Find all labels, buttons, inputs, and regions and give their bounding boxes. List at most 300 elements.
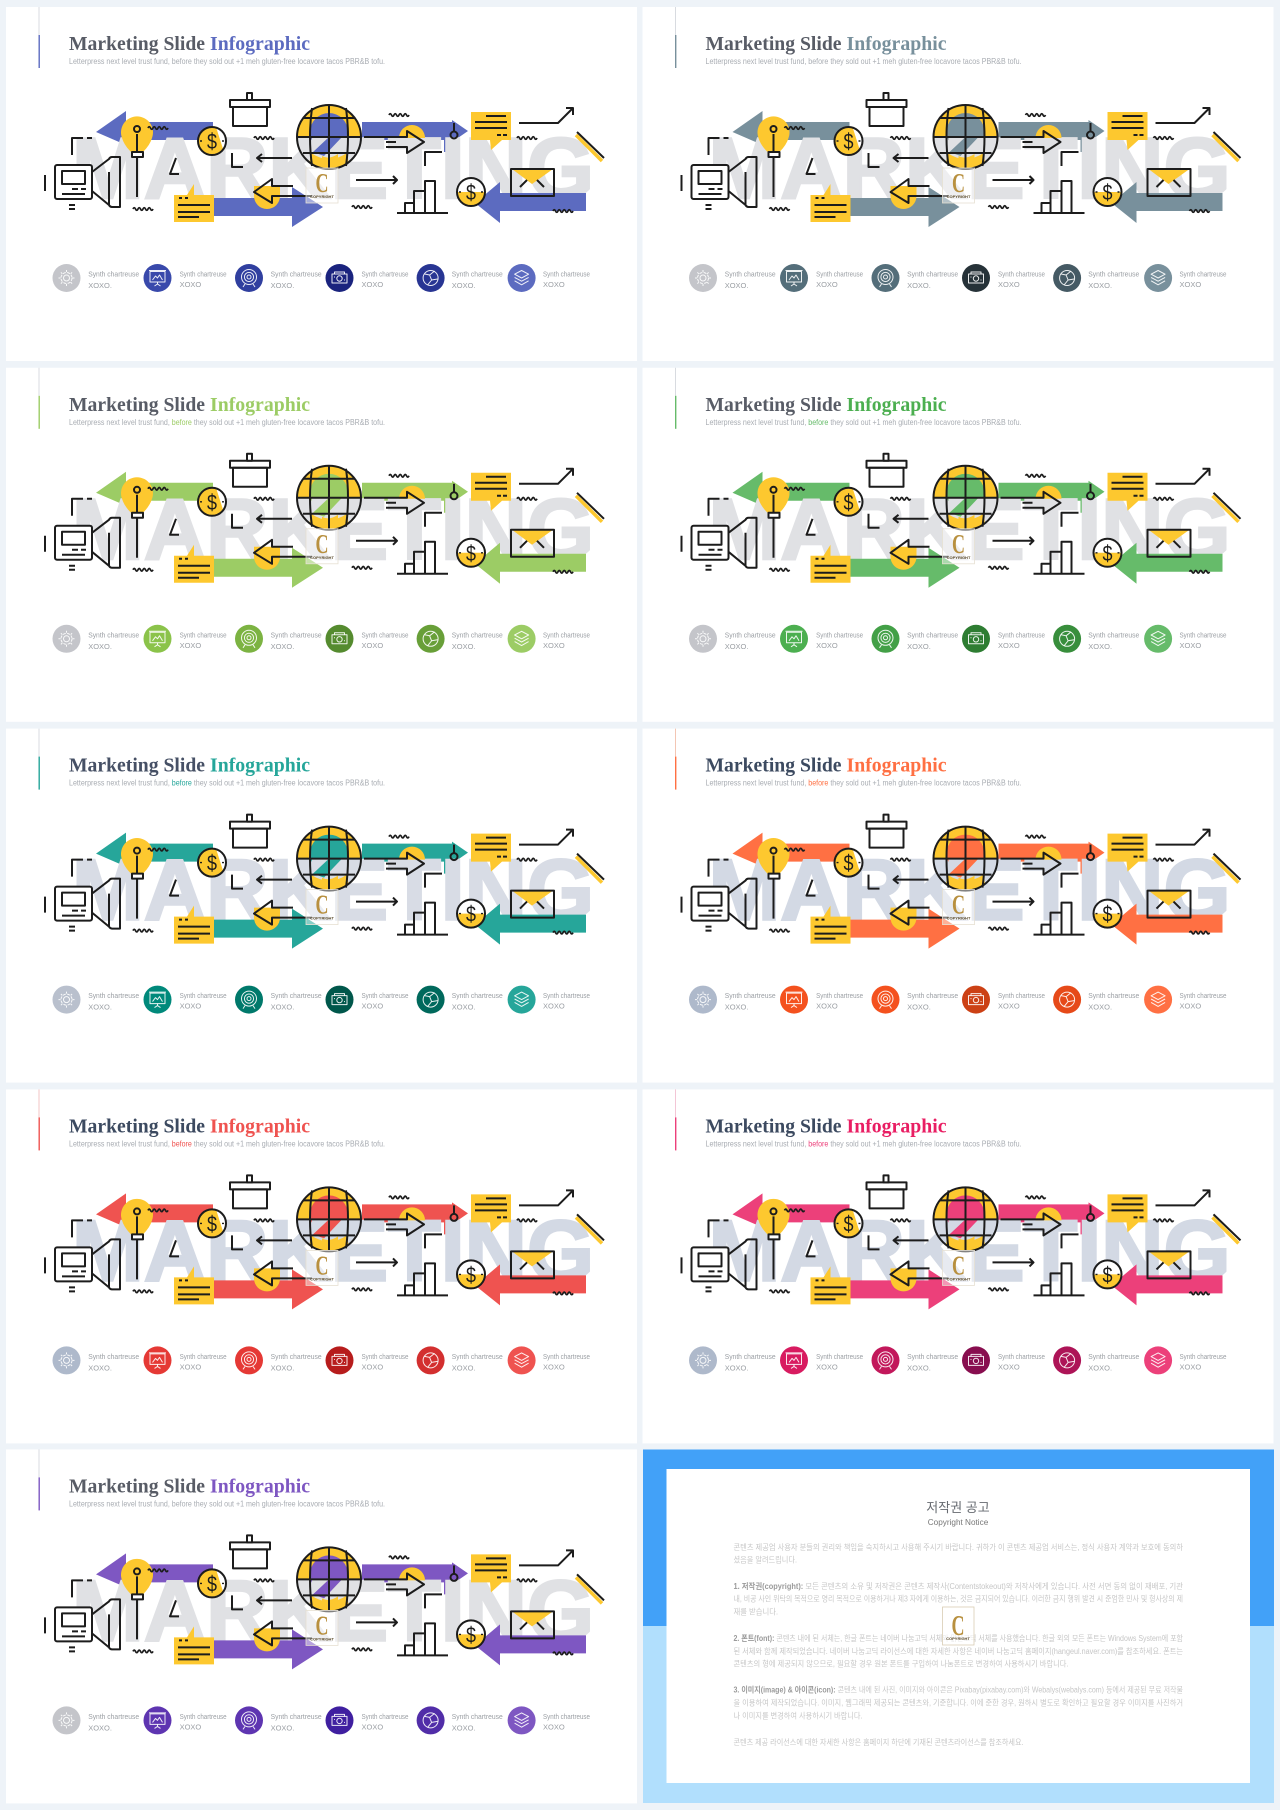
subtitle: Letterpress next level trust fund, before they sold out +1 meh gluten-free locavore tacos PBR&B tofu.	[706, 418, 1022, 427]
arrow: hollow right	[364, 847, 425, 875]
legend item 2	[780, 264, 863, 292]
legend item 2: XOXO	[816, 1362, 838, 1371]
icon: diagonal pencil	[1212, 1214, 1240, 1243]
legend item 6: Synth chartreuse	[1180, 1352, 1226, 1361]
icon: coin top: $	[844, 490, 854, 515]
legend item 5	[417, 625, 503, 653]
arrows: top	[732, 1193, 1104, 1234]
legend item 3: XOXO.	[271, 1003, 294, 1012]
legend item 4	[962, 986, 1045, 1014]
panel: blue-grey slide	[642, 7, 1274, 361]
arrows: bottom	[850, 543, 1222, 588]
logo stamp: COPYRIGHT	[310, 1636, 334, 1641]
legend item 6: XOXO	[543, 1722, 565, 1731]
logo stamp: COPYRIGHT	[947, 555, 971, 560]
icon: monitor and horn	[682, 499, 756, 570]
icon: basket	[230, 93, 270, 126]
title: Marketing Slide	[69, 33, 205, 55]
icon: coin top	[198, 127, 226, 155]
arrow: trend up	[1156, 1190, 1210, 1205]
icon: coin bottom	[457, 900, 485, 928]
icon: coin bottom: $	[466, 1622, 476, 1647]
icon: envelope	[511, 891, 554, 918]
panel: red slide	[6, 1089, 637, 1443]
logo stamp	[942, 1250, 974, 1285]
arrow: trend up	[519, 1550, 573, 1565]
arrows: bottom	[850, 1264, 1222, 1309]
icon: light bulb	[121, 1559, 153, 1639]
legend item 5	[417, 264, 503, 292]
legend item 5: XOXO.	[452, 281, 476, 290]
icon: coin bottom: $	[466, 1262, 476, 1287]
legend item 3	[235, 1346, 322, 1374]
legend item 5: Synth chartreuse	[452, 1712, 503, 1721]
subtitle: Letterpress next level trust fund, before they sold out +1 meh gluten-free locavore tacos PBR&B tofu.	[706, 57, 1022, 66]
panel: pink slide	[642, 1089, 1274, 1443]
legend item 4	[326, 264, 408, 292]
wordmark: MARKETING	[708, 482, 1230, 578]
icon: coin bottom: $	[1102, 180, 1112, 205]
accent line	[38, 1477, 40, 1510]
legend item 4: Synth chartreuse	[998, 630, 1045, 639]
title	[69, 394, 310, 416]
icon: diagonal pencil	[1212, 854, 1240, 883]
subtitle: Letterpress next level trust fund, before they sold out +1 meh gluten-free locavore tacos PBR&B tofu.	[69, 779, 385, 788]
heading: english: Copyright Notice	[928, 1518, 989, 1527]
legend item 5	[417, 986, 503, 1014]
squiggles	[133, 835, 573, 934]
logo stamp: C	[316, 1610, 328, 1640]
title	[69, 755, 310, 777]
small connector lines	[806, 484, 1094, 545]
title: Infographic	[210, 33, 310, 55]
icon: diagonal pencil	[1212, 493, 1240, 522]
title: Infographic	[846, 394, 946, 416]
legend item 4: Synth chartreuse	[362, 630, 408, 639]
legend item 4	[962, 625, 1045, 653]
icon: light bulb	[758, 116, 790, 197]
legend item 4: Synth chartreuse	[362, 991, 408, 1000]
legend item 3	[235, 625, 322, 653]
icon: coin bottom: $	[466, 902, 476, 927]
legend item 6: Synth chartreuse	[543, 1712, 590, 1721]
legend item 2: Synth chartreuse	[816, 1352, 863, 1361]
icon: coin top	[198, 849, 226, 877]
notice 1: copyright	[734, 1581, 1184, 1616]
squiggles	[133, 1196, 573, 1295]
icon: coin top	[198, 488, 226, 516]
legend item 1	[689, 264, 776, 292]
icon: globe	[295, 1187, 365, 1254]
legend item 3: XOXO.	[271, 281, 294, 290]
arrow: trend up	[519, 469, 573, 484]
squiggles	[770, 474, 1210, 573]
arrows: bottom	[214, 543, 586, 588]
logo stamp	[306, 1250, 338, 1285]
legend item 1: Synth chartreuse	[725, 1352, 776, 1361]
notice intro: 콘텐츠 제공업 사용자 분들의 권리와 책임을 숙지하시고 사용해 주시기 바랍니다. 귀하가 이 콘텐츠 제공업 서비스는, 정식 사용자 계약과 보호에 동의하	[734, 1542, 1184, 1552]
title: Marketing Slide	[69, 1475, 205, 1497]
squiggles	[770, 114, 1210, 212]
subtitle: Letterpress next level trust fund, before they sold out +1 meh gluten-free locavore tacos PBR&B tofu.	[706, 779, 1022, 788]
arrow: hollow left	[890, 901, 948, 931]
squiggles	[133, 1556, 573, 1655]
title: Infographic	[846, 1115, 946, 1137]
title	[69, 1475, 310, 1497]
icon: envelope	[1148, 891, 1190, 918]
arrow: hollow right	[364, 1207, 425, 1235]
legend item 6	[1144, 625, 1226, 653]
legend item 3	[872, 264, 958, 292]
legend item 5	[1053, 625, 1139, 653]
logo stamp: COPYRIGHT	[310, 916, 334, 921]
arrow: hollow left	[254, 901, 312, 931]
notice 3: image and icon: 나 이미지를 변경하여 사용하시기 바랍니다.	[734, 1710, 862, 1720]
title: Marketing Slide	[706, 394, 842, 416]
legend item 6: XOXO	[543, 280, 565, 289]
legend item 2: Synth chartreuse	[180, 630, 227, 639]
wordmark: MARKETING	[72, 1203, 594, 1299]
legend item 1: XOXO.	[88, 281, 112, 290]
accent line	[675, 1117, 676, 1150]
legend item 5: XOXO.	[1088, 281, 1112, 290]
icon: envelope	[511, 530, 554, 557]
notice 3: image and icon: 을 이용하여 제작되었습니다. 이미지, 웹그래픽 제공되는 콘텐츠와, 기준합니다. 이에 준한 경우, 원하시 별도로 확인하고 필요할 경우 이미지를 사진하거	[734, 1698, 1183, 1708]
legend item 5: Synth chartreuse	[452, 991, 503, 1000]
icon: globe	[295, 1547, 365, 1614]
icon: chat right	[471, 1554, 511, 1592]
legend item 6: XOXO	[543, 1362, 565, 1371]
icon: envelope	[1148, 530, 1190, 557]
logo stamp: C	[952, 1250, 965, 1280]
legend item 1: XOXO.	[88, 1723, 112, 1732]
arrow: hollow right	[1000, 847, 1062, 875]
legend item 6	[508, 1346, 590, 1374]
subtitle: Letterpress next level trust fund, before they sold out +1 meh gluten-free locavore tacos PBR&B tofu.	[69, 418, 385, 427]
title	[69, 33, 310, 55]
notice 2: font: 2. 폰트(font): 콘텐츠 내에 된 서체는, 한글 폰트는 네이버 나눔고딕 서체와 맑은고딕 서체를 사용했습니다. 한글 외의 모든 폰트는 Windows System에 포함	[734, 1633, 1184, 1643]
arrows: top	[732, 833, 1104, 874]
subtitle: Letterpress next level trust fund, before they sold out +1 meh gluten-free locavore tacos PBR&B tofu.	[69, 1139, 385, 1148]
arrows: bottom	[214, 904, 586, 949]
arrow: hollow right	[364, 486, 425, 514]
arrow: hollow left	[890, 540, 948, 570]
arrow: hollow right	[1000, 1207, 1062, 1235]
icon: globe	[295, 466, 365, 533]
legend item 4: Synth chartreuse	[362, 1712, 408, 1721]
icon: coin top	[834, 849, 862, 877]
icon: coin bottom: $	[1102, 1262, 1112, 1287]
logo stamp: C	[952, 1610, 964, 1642]
icon: coin top	[198, 1209, 226, 1237]
icon: coin bottom	[1094, 1260, 1122, 1288]
squiggles	[770, 1196, 1210, 1295]
accent line	[38, 757, 40, 790]
title	[706, 1115, 946, 1137]
icon: light bulb	[121, 1199, 153, 1279]
icon: chat left	[174, 184, 214, 222]
icon: globe	[932, 466, 1002, 533]
logo stamp: COPYRIGHT	[947, 1276, 971, 1281]
legend item 2: XOXO	[180, 280, 201, 289]
frame bottom light blue	[643, 1626, 1274, 1803]
legend item 6	[508, 1706, 590, 1734]
icon: coin top	[834, 127, 862, 155]
title: Infographic	[210, 394, 310, 416]
icon: coin bottom	[457, 1620, 485, 1648]
legend item 3: Synth chartreuse	[271, 270, 322, 278]
small connector lines	[806, 845, 1094, 906]
icon: chat left	[810, 1266, 850, 1304]
legend item 6: XOXO	[1180, 641, 1201, 650]
legend item 2	[144, 1346, 227, 1374]
bar chart	[1034, 903, 1084, 935]
logo stamp: C	[316, 168, 328, 198]
legend item 2: XOXO	[816, 641, 838, 650]
bar chart	[397, 1623, 448, 1655]
legend item 6: Synth chartreuse	[543, 991, 590, 1000]
notice 2: font: 된 서체와 함께 제작되었습니다. 네이버 나눔고딕 라이선스에 대한 자세한 사항은 네이버 나눔고딕 홈페이지(hangeul.naver.com)를 참조하세요. 폰트는	[734, 1646, 1183, 1656]
logo stamp	[306, 168, 338, 203]
legend item 4: XOXO	[362, 641, 383, 650]
legend item 1: Synth chartreuse	[725, 270, 776, 278]
legend item 5	[417, 1346, 503, 1374]
icon: chat right	[471, 834, 511, 872]
logo stamp: COPYRIGHT	[947, 916, 971, 921]
legend item 6	[1144, 264, 1226, 292]
arrows: bottom	[214, 1624, 586, 1669]
title: Infographic	[846, 33, 946, 55]
icon: chat left	[174, 906, 214, 944]
accent line	[38, 396, 40, 429]
small connector lines	[170, 484, 458, 545]
title: Infographic	[210, 1115, 310, 1137]
legend item 4: XOXO	[362, 1002, 383, 1011]
legend item 1: XOXO.	[725, 642, 748, 651]
legend item 1	[52, 1706, 139, 1734]
panel: light green slide	[6, 368, 637, 722]
legend item 3: XOXO.	[907, 281, 931, 290]
legend item 6: Synth chartreuse	[1180, 630, 1226, 639]
icon: monitor and horn	[682, 860, 756, 931]
small connector lines	[170, 845, 458, 906]
icon: chat right	[1108, 1194, 1148, 1232]
notice 1: copyright: 재를 받습니다.	[734, 1606, 778, 1616]
legend item 1: XOXO.	[88, 642, 112, 651]
legend item 2	[780, 986, 863, 1014]
logo stamp: C	[952, 168, 965, 198]
squiggles	[133, 474, 573, 573]
legend item 4: Synth chartreuse	[998, 270, 1045, 278]
icon: chat left	[810, 545, 850, 583]
icon: coin bottom	[457, 1260, 485, 1288]
legend item 6	[508, 986, 590, 1014]
icon: monitor and horn	[45, 1580, 120, 1651]
legend item 4: Synth chartreuse	[998, 991, 1045, 1000]
legend item 6: XOXO	[1180, 280, 1201, 289]
legend item 1: XOXO.	[725, 281, 748, 290]
icon: coin bottom	[1094, 539, 1122, 567]
logo stamp: COPYRIGHT	[947, 194, 971, 199]
arrows: top	[96, 833, 468, 874]
squiggles	[133, 114, 573, 212]
notice 1: copyright: 1. 저작권(copyright): 모든 콘텐츠의 소유 및 저작권은 콘텐츠 제작사(Contentstokeout)와 저작사에게 있습니다. 사전 서면 동의 없이 재배포, 기관	[734, 1581, 1184, 1591]
accent line	[38, 35, 40, 68]
icon: basket	[230, 1535, 270, 1568]
wordmark: MARKETING	[72, 121, 594, 217]
legend item 3: Synth chartreuse	[907, 630, 958, 639]
title: Marketing Slide	[706, 33, 842, 55]
arrow: hollow left	[890, 1261, 948, 1291]
icon: coin top: $	[844, 851, 854, 876]
legend item 5: XOXO.	[452, 1363, 476, 1372]
icon: monitor and horn	[682, 1220, 756, 1291]
legend item 5: XOXO.	[1088, 1003, 1112, 1012]
arrows: top	[96, 472, 468, 513]
legend item 2: Synth chartreuse	[180, 1352, 227, 1361]
legend item 5: XOXO.	[452, 1723, 476, 1732]
bar chart	[397, 181, 448, 213]
arrow: trend up	[1156, 469, 1210, 484]
icon: coin top: $	[207, 851, 217, 876]
legend item 4: Synth chartreuse	[998, 1352, 1045, 1361]
legend item 5	[1053, 264, 1139, 292]
arrows: top	[96, 111, 468, 152]
legend item 2: Synth chartreuse	[816, 630, 863, 639]
notice 3: image and icon	[734, 1684, 1183, 1720]
legend item 5: XOXO.	[1088, 1363, 1112, 1372]
logo stamp	[306, 1610, 338, 1645]
legend item 1	[52, 986, 139, 1014]
logo stamp	[942, 168, 974, 203]
panel: indigo slide	[6, 7, 637, 361]
logo stamp: C	[316, 890, 328, 920]
legend item 3: Synth chartreuse	[907, 1352, 958, 1361]
legend item 6: XOXO	[1180, 1362, 1201, 1371]
logo stamp	[942, 1607, 974, 1645]
icon: coin top: $	[844, 1211, 854, 1236]
notice 3: image and icon: 3. 이미지(image) & 아이콘(icon): 콘텐츠 내에 된 사진, 이미지와 아이콘은 Pixabay(pixabay.com)와 Webalys(webalys.com) 등에서 제공된 무료 저작물	[734, 1684, 1183, 1694]
arrows: top	[96, 1193, 468, 1234]
legend item 1: XOXO.	[88, 1003, 112, 1012]
arrow: trend up	[519, 1190, 573, 1205]
legend item 3	[235, 1706, 322, 1734]
legend item 3: XOXO.	[271, 1723, 294, 1732]
icon: coin bottom: $	[1102, 902, 1112, 927]
icon: monitor and horn	[45, 499, 120, 570]
wordmark: MARKETING	[708, 843, 1230, 939]
notice intro: 셨음을 알려드립니다.	[734, 1554, 797, 1564]
logo stamp: C	[952, 890, 965, 920]
logo stamp: C	[316, 529, 328, 559]
legend item 2: Synth chartreuse	[180, 270, 227, 278]
legend item 3: XOXO.	[907, 642, 931, 651]
logo stamp	[942, 529, 974, 564]
legend item 3: XOXO.	[907, 1363, 931, 1372]
small connector lines	[170, 123, 458, 184]
bar chart	[1034, 181, 1084, 213]
legend item 1: Synth chartreuse	[88, 1712, 139, 1721]
logo stamp	[306, 529, 338, 564]
legend item 6	[508, 264, 590, 292]
legend item 3: XOXO.	[271, 1363, 294, 1372]
wordmark: MARKETING	[72, 482, 594, 578]
title: Marketing Slide	[706, 755, 842, 777]
small connector lines	[806, 123, 1094, 184]
icon: globe	[932, 1187, 1002, 1254]
small connector lines	[806, 1205, 1094, 1266]
bar chart	[1034, 542, 1084, 574]
legend item 5: XOXO.	[452, 642, 476, 651]
legend item 4	[326, 986, 408, 1014]
legend item 3: Synth chartreuse	[271, 1352, 322, 1361]
legend item 5: Synth chartreuse	[452, 1352, 503, 1361]
legend item 4: XOXO	[998, 1362, 1020, 1371]
legend item 5	[1053, 1346, 1139, 1374]
notice 2: font	[734, 1633, 1184, 1668]
legend item 1	[689, 625, 776, 653]
arrow: hollow left	[254, 540, 312, 570]
icon: monitor and horn	[45, 138, 120, 209]
legend item 3: Synth chartreuse	[907, 270, 958, 278]
legend item 1: Synth chartreuse	[88, 1352, 139, 1361]
frame top blue	[643, 1450, 1274, 1626]
arrow: hollow left	[254, 179, 312, 209]
legend item 1: XOXO.	[88, 1363, 112, 1372]
arrows: bottom	[850, 904, 1222, 949]
icon: basket	[866, 1175, 906, 1208]
icon: envelope	[1148, 169, 1190, 196]
arrow: hollow right	[1000, 125, 1062, 153]
icon: diagonal pencil	[576, 854, 604, 883]
logo stamp: C	[316, 1250, 328, 1280]
legend item 2	[780, 1346, 863, 1374]
arrow: hollow left	[890, 179, 948, 209]
wordmark: MARKETING	[72, 843, 594, 939]
legend item 3: Synth chartreuse	[271, 991, 322, 1000]
title: Marketing Slide	[69, 755, 205, 777]
panel: green slide	[642, 368, 1274, 722]
notice 2: font: 콘텐츠의 형에 제공되지 않으므로, 필요할 경우 원본 폰트를 구입하여 나눔폰트로 변경하여 사용하시기 바랍니다.	[734, 1658, 1068, 1668]
icon: monitor and horn	[682, 138, 756, 209]
icon: envelope	[511, 1611, 554, 1638]
legend item 2	[144, 625, 227, 653]
icon: basket	[866, 93, 906, 126]
panel: copyright notice	[643, 1450, 1274, 1803]
arrow: trend up	[519, 108, 573, 123]
accent line	[675, 757, 676, 790]
icon: envelope	[1148, 1251, 1190, 1278]
legend item 3: XOXO.	[907, 1003, 931, 1012]
title	[706, 755, 946, 777]
legend item 5: Synth chartreuse	[1088, 630, 1139, 639]
legend item 5: XOXO.	[452, 1003, 476, 1012]
logo stamp: C	[952, 529, 965, 559]
notice intro	[734, 1542, 1184, 1564]
bar chart	[397, 1263, 448, 1295]
legend item 2: XOXO	[180, 1002, 201, 1011]
icon: chat left	[810, 906, 850, 944]
small connector lines	[170, 1565, 458, 1626]
logo stamp: COPYRIGHT	[946, 1636, 970, 1641]
icon: coin top: $	[207, 1211, 217, 1236]
arrow: trend up	[519, 830, 573, 845]
legend item 3	[872, 1346, 958, 1374]
arrow: trend up	[1156, 830, 1210, 845]
icon: chat right	[1108, 834, 1148, 872]
wordmark: MARKETING	[708, 1203, 1230, 1299]
icon: globe	[932, 105, 1002, 172]
